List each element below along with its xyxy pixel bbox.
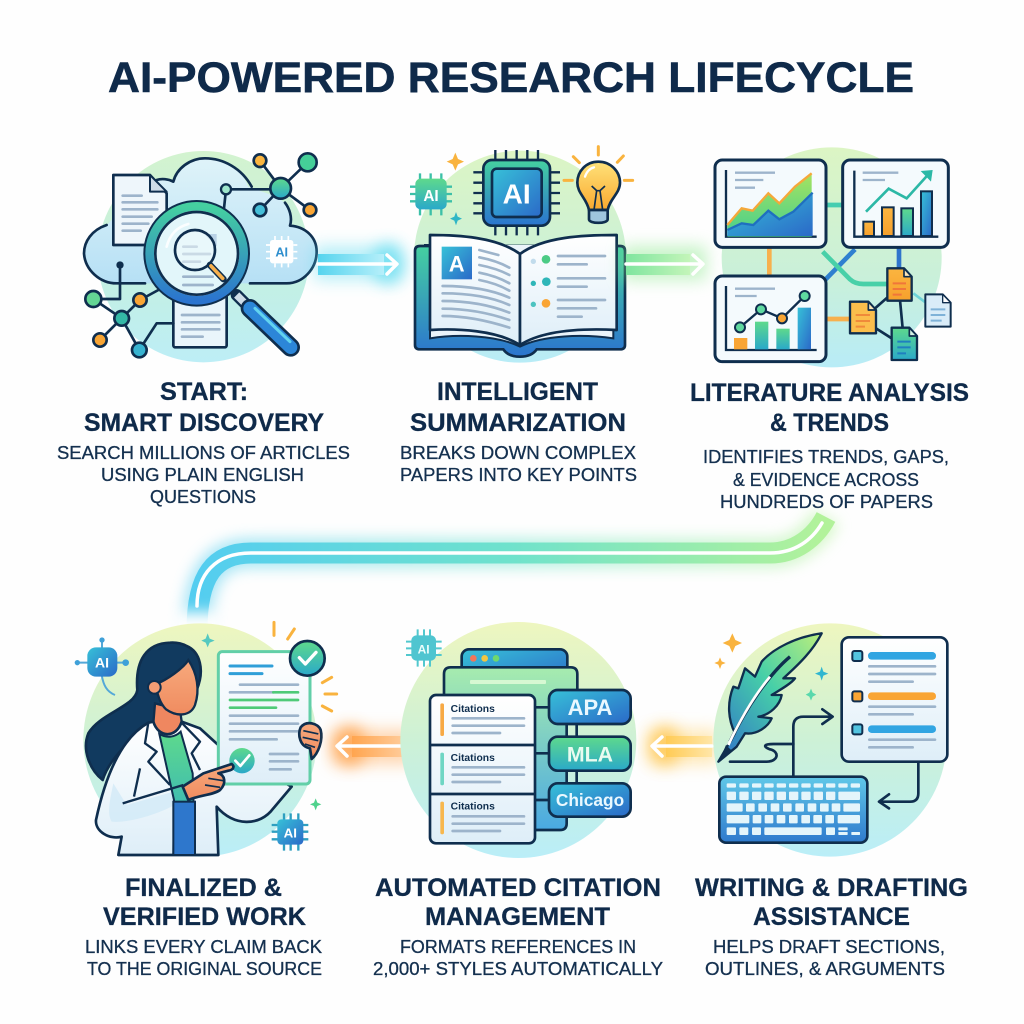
heading: intelligent summarization: SUMMARIZATION: [410, 409, 626, 437]
verified document: [218, 652, 310, 784]
AI chip on cloud: [266, 236, 297, 267]
text: summarization description: BREAKS DOWN COMPLEX: [400, 443, 636, 463]
text: writing description: [705, 937, 945, 979]
document bottom: [173, 267, 227, 347]
heading: intelligent summarization: INTELLIGENT: [437, 378, 598, 406]
coat lapels: [123, 723, 200, 803]
panel: literature analysis icon: [715, 147, 951, 367]
arrow: summarization to analysis: [622, 246, 706, 280]
keyboard: [719, 777, 867, 843]
text: writing description: HELPS DRAFT SECTIONS,: [713, 937, 945, 957]
open book: [415, 235, 625, 357]
panel: summarization icon: [410, 147, 633, 363]
blue tie panel: [173, 802, 195, 855]
cloud outline: [84, 158, 317, 283]
panel: finalized work icon: [75, 622, 337, 857]
panel: citation management icon: [400, 622, 636, 858]
holding hand: [299, 723, 321, 759]
face: [156, 660, 197, 714]
AI assistant blob: [75, 637, 129, 695]
panel: smart discovery icon: [84, 151, 317, 362]
network connectors: [769, 205, 927, 319]
text: literature analysis description: HUNDREDS OF PAPERS: [720, 492, 933, 512]
style badge: MLA: MLA: [567, 742, 613, 766]
sparkles: [201, 633, 321, 810]
citation cards: [430, 695, 535, 843]
back browser window: [462, 649, 567, 686]
background circle: [722, 147, 942, 367]
title: AI-POWERED RESEARCH LIFECYCLE: [108, 54, 914, 102]
small AI chip: [406, 629, 442, 667]
text: citation description: FORMATS REFERENCES IN: [400, 937, 636, 957]
text: smart discovery description: QUESTIONS: [150, 487, 256, 507]
neck: [153, 703, 182, 734]
small AI chip: [410, 173, 452, 215]
text: smart discovery description: USING PLAIN ENGLISH: [101, 465, 304, 485]
background circle: [400, 622, 636, 858]
AI chip on cloud: AI: [275, 246, 288, 260]
AI chip: AI: [284, 826, 297, 841]
background circle: [713, 623, 947, 857]
heading: automated citation management: [375, 874, 661, 931]
text: finalized description: TO THE ORIGINAL SOURCE: [87, 959, 322, 979]
heading: literature analysis: [690, 379, 969, 437]
heading: writing and drafting assistance: WRITING & DRAFTING: [695, 874, 968, 902]
heading: start smart discovery: [84, 378, 324, 437]
sparkles: [447, 153, 464, 225]
document check badge: [290, 641, 325, 676]
style badge: APA: APA: [568, 695, 613, 720]
heading: finalized and verified work: VERIFIED WORK: [103, 903, 306, 931]
panel: writing assistance icon: [713, 623, 947, 857]
text: literature analysis description: IDENTIFIES TRENDS, GAPS,: [703, 447, 949, 467]
text: literature analysis description: & EVIDENCE ACROSS: [733, 470, 919, 490]
small AI chip: AI: [418, 642, 430, 656]
network top right: [221, 153, 317, 216]
heading: finalized and verified work: FINALIZED &: [125, 874, 282, 902]
style connectors: [535, 707, 577, 800]
heading: intelligent summarization: [410, 378, 626, 437]
long hair: [86, 643, 201, 780]
background circle: [98, 151, 309, 362]
feather quill: [718, 633, 822, 762]
heading: literature analysis: & TRENDS: [770, 409, 889, 437]
heading: start smart discovery: SMART DISCOVERY: [84, 409, 324, 437]
sparkles: [714, 633, 828, 701]
chart: bars and trend arrow: [843, 160, 948, 247]
small AI chip: AI: [423, 188, 439, 205]
arrow: long connector from analysis to finalized: [170, 517, 826, 646]
text: smart discovery description: SEARCH MILLIONS OF ARTICLES: [57, 443, 350, 463]
inline check badge: [229, 748, 255, 773]
AI assistant blob: AI: [95, 654, 109, 670]
style badge: MLA: [549, 737, 631, 771]
text: citation description: [373, 937, 663, 979]
burst rays: [274, 622, 337, 711]
main AI chip: [473, 150, 560, 235]
AI chip: [272, 813, 308, 851]
lab coat: [96, 722, 292, 855]
network bottom left: [85, 261, 173, 357]
heading: writing and drafting assistance: [695, 874, 968, 931]
text: finalized description: [85, 937, 322, 979]
document top: [113, 175, 167, 245]
pointing hand: [183, 764, 233, 800]
arrow: writing to citation: [648, 726, 718, 766]
outline document: [842, 637, 947, 762]
cloud: [84, 158, 317, 283]
text: writing description: OUTLINES, & ARGUMENTS: [705, 959, 945, 979]
heading: writing and drafting assistance: ASSISTANCE: [753, 903, 910, 931]
arrow: discovery to summarization: [314, 244, 404, 284]
style badge: Chicago: [549, 783, 631, 817]
background circle: [414, 151, 626, 363]
document cluster: [850, 268, 951, 360]
ear: [148, 681, 161, 694]
heading: automated citation management: AUTOMATED CITATION: [375, 874, 661, 902]
text: finalized description: LINKS EVERY CLAIM BACK: [85, 937, 322, 957]
heading: automated citation management: MANAGEMENT: [425, 903, 610, 931]
arrow: citation to finalized: [332, 726, 416, 766]
text: literature analysis description: [703, 447, 949, 512]
citation cards: Citations: [451, 753, 495, 764]
coat sleeve shading: [109, 783, 185, 822]
heading: finalized and verified work: [103, 874, 306, 931]
text: summarization description: [400, 443, 637, 485]
style badge: APA: [549, 690, 631, 724]
heading: literature analysis: LITERATURE ANALYSIS: [690, 379, 969, 407]
main AI chip: AI: [503, 178, 531, 209]
text: smart discovery description: [57, 443, 350, 507]
magnifying glass: [145, 201, 291, 347]
text: summarization description: PAPERS INTO KEY POINTS: [400, 465, 637, 485]
background circle: [83, 623, 317, 857]
heading: start smart discovery: START:: [160, 378, 248, 406]
text: citation description: 2,000+ STYLES AUTOMATICALLY: [373, 959, 663, 979]
middle window panel: [444, 667, 577, 830]
citation cards: Citations: [451, 802, 495, 813]
open book: A: [449, 252, 465, 277]
chart: line and bars: [715, 276, 826, 362]
chart: area: [715, 160, 826, 247]
citation cards: Citations: [451, 704, 495, 715]
connector arrows: [730, 709, 918, 808]
shirt: [159, 732, 195, 855]
style badge: Chicago: Chicago: [556, 790, 624, 810]
light bulb: [564, 147, 633, 223]
